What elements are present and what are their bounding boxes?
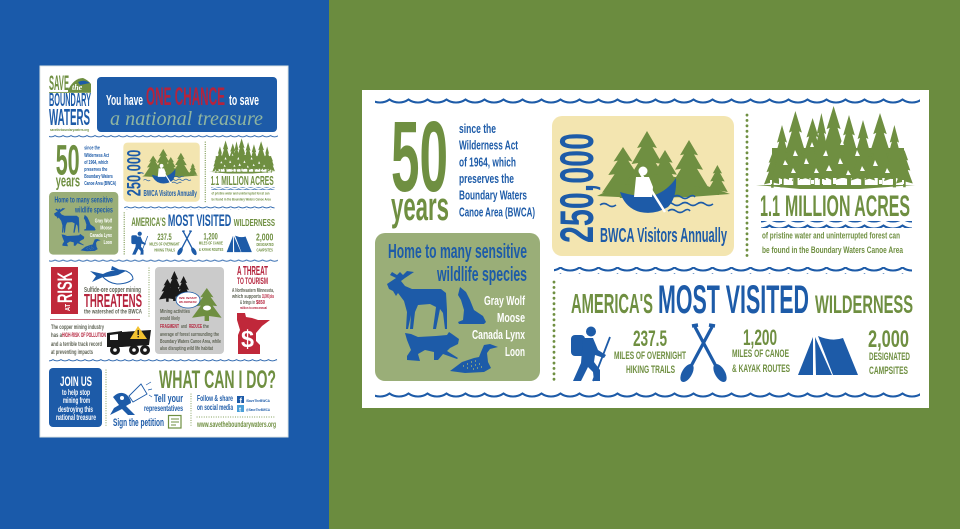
text: pristine water: be found in the Boundary Waters Canoe Area xyxy=(762,245,903,256)
icon: canoe scene xyxy=(597,131,730,213)
text: copper mining industry: and a terrible track record xyxy=(51,341,102,348)
at risk badge: RISK xyxy=(54,272,77,303)
panel: full poster: BOUNDARY xyxy=(49,90,91,110)
panel: fragmented forest xyxy=(155,267,224,354)
poster copy of wilderness card: of 1964, which xyxy=(84,160,108,166)
text: forest impacts: the xyxy=(203,324,209,330)
logo: Save the Boundary Waters: savetheboundarywaters.org xyxy=(50,127,89,132)
text: threatens: Sulfide-ore copper mining xyxy=(84,285,141,294)
logo: Save the Boundary Waters: the xyxy=(72,83,83,92)
text: threat to tourism xyxy=(231,263,274,310)
website url: www.savetheboundarywaters.org xyxy=(196,420,276,429)
text: forest impacts: Mining activities xyxy=(160,309,190,315)
panel: full poster: 18,000 jobs xyxy=(262,294,274,300)
at risk badge xyxy=(51,267,78,314)
poster copy of wilderness card: Boundary Waters xyxy=(84,174,113,180)
icon: forest xyxy=(756,106,915,189)
text: tell your representatives: representatives xyxy=(144,403,183,413)
text: forest impacts: also disrupting wild life habitat xyxy=(160,346,213,352)
stat: 50 years xyxy=(391,101,449,229)
text: forest impacts xyxy=(159,309,221,352)
text: copper mining industry: The copper mining industry xyxy=(51,324,104,331)
poster copy of wilderness card: years xyxy=(56,172,80,191)
heading: most visited wilderness xyxy=(571,278,913,322)
text: threat to tourism: A THREAT xyxy=(237,263,268,278)
text: forest impacts: would likely xyxy=(159,316,181,322)
stat: canoe routes: 1,200 xyxy=(743,325,777,350)
poster copy of wilderness card: MILLION ACRES xyxy=(221,174,274,188)
poster copy of wilderness card: be found in the Boundary Waters Canoe Area xyxy=(212,197,271,202)
stat: campsites: CAMPSITES xyxy=(869,365,908,377)
poster copy of wilderness card: DESIGNATED xyxy=(256,242,274,247)
icon: facebook: /SaveTheBWCA xyxy=(246,398,270,403)
panel: visitors xyxy=(550,116,734,256)
heading: most visited wilderness: AMERICA'S xyxy=(571,288,653,319)
text: threatens: THREATENS xyxy=(84,291,142,311)
text: wilderness act: since the xyxy=(459,122,496,136)
text: wilderness act: Wilderness Act xyxy=(459,139,519,153)
stat: campsites xyxy=(868,326,910,377)
text: tell your representatives xyxy=(144,393,183,413)
poster copy of wilderness card: MILES OF CANOE xyxy=(199,240,223,246)
poster copy of wilderness card xyxy=(49,135,278,262)
icon: twitter xyxy=(237,405,270,414)
poster copy of wilderness card: & KAYAK ROUTES xyxy=(199,247,223,252)
stat: canoe routes: & KAYAK ROUTES xyxy=(732,363,790,375)
panel: wilderness card xyxy=(362,90,929,408)
stat: 250,000: 250,000 xyxy=(550,133,603,243)
stat: hiking trails: HIKING TRAILS xyxy=(626,364,675,376)
text: follow and share xyxy=(197,394,233,412)
poster copy of wilderness card: Home to many sensitive xyxy=(54,195,113,205)
poster copy of wilderness card: Wilderness Act xyxy=(84,153,109,159)
stat: hiking trails: 237.5 xyxy=(633,326,667,351)
icon: facebook: f xyxy=(240,396,242,405)
panel: join us: to help stop xyxy=(62,388,90,397)
icon: lynx xyxy=(405,332,459,361)
poster copy of wilderness card: Loon xyxy=(104,240,112,246)
heading: wildlife xyxy=(388,241,527,286)
text: pristine water xyxy=(762,231,903,256)
icon: megaphone figure xyxy=(110,382,152,415)
text: wilderness act: Boundary Waters xyxy=(459,189,527,203)
stat: canoe routes: MILES OF CANOE xyxy=(732,348,789,360)
text: copper mining industry xyxy=(51,324,106,356)
text: forest impacts: FRAGMENT xyxy=(160,324,179,330)
icon: mining truck xyxy=(107,326,151,355)
poster copy of wilderness card: WILDERNESS xyxy=(234,217,275,229)
species list xyxy=(472,293,526,359)
banner: one chance: a national treasure xyxy=(110,108,263,130)
icon: black trees xyxy=(159,271,191,302)
text: wilderness act: preserves the xyxy=(459,172,514,186)
species list: Gray Wolf xyxy=(484,293,525,308)
banner: one chance: You have xyxy=(106,92,143,109)
poster copy of wilderness card: 250,000 xyxy=(124,150,146,196)
banner: one chance: to save xyxy=(229,92,259,109)
text: wilderness act: Canoe Area (BWCA) xyxy=(459,205,535,219)
text: threat to tourism: & brings in xyxy=(240,300,255,306)
stat: campsites: DESIGNATED xyxy=(869,351,910,363)
text: threat to tourism: million to area annual xyxy=(240,306,267,310)
icon: hiker xyxy=(571,326,610,381)
icon: fish xyxy=(90,266,133,284)
icon: twitter: t xyxy=(239,406,242,414)
heading: wildlife: wildlife species xyxy=(436,264,527,286)
poster copy of wilderness card: 1,200 xyxy=(204,231,218,241)
heading: what can I do: WHAT CAN I DO? xyxy=(159,366,276,394)
speech bubble: WILDERNESS! xyxy=(179,300,197,304)
poster copy of wilderness card: wildlife species xyxy=(74,204,113,214)
stat: 50 years: years xyxy=(391,185,449,229)
icon: tent xyxy=(798,336,858,375)
text: threat to tourism: which supports xyxy=(231,294,261,300)
text: threat to tourism: TO TOURISM xyxy=(237,276,268,287)
icon: facebook xyxy=(237,396,270,405)
banner: one chance xyxy=(97,77,277,132)
poster copy of wilderness card: Moose xyxy=(100,226,112,232)
top wave xyxy=(375,97,920,104)
divider wave xyxy=(49,359,277,362)
text: follow and share: on social media xyxy=(197,403,233,412)
icon: moose xyxy=(387,271,447,329)
text: copper mining industry: at preventing impacts xyxy=(51,349,93,356)
panel: join us xyxy=(49,368,102,427)
stat: canoe routes xyxy=(732,325,790,375)
logo: Save the Boundary Waters: SAVE xyxy=(49,72,69,95)
stat: 1.1 million acres: 1.1 xyxy=(760,190,780,223)
panel: full poster xyxy=(40,66,288,437)
text: forest impacts: Boundary Waters Canoe Area, while xyxy=(160,339,221,345)
text: wilderness act xyxy=(459,122,535,219)
poster copy of wilderness card: MOST VISITED xyxy=(168,211,231,230)
poster copy of wilderness card: 1.1 xyxy=(211,174,219,188)
poster copy of wilderness card: Canada Lynx xyxy=(90,233,112,239)
species list: Canada Lynx xyxy=(472,327,526,342)
text: copper mining industry: HIGH-RISK OF POLLUTION xyxy=(62,332,106,339)
icon: loon xyxy=(450,344,498,373)
stat: 50 years: 50 xyxy=(391,101,448,213)
icon: wolf xyxy=(458,287,486,324)
panel: full poster: WATERS xyxy=(49,104,90,130)
panel: join us: JOIN US xyxy=(60,373,92,389)
caption: visitors annually: BWCA Visitors Annually xyxy=(600,225,727,247)
poster copy of wilderness card: MILES OF OVERNIGHT xyxy=(149,241,180,246)
panel: join us: mining from xyxy=(63,396,90,405)
poster copy of wilderness card: 237.5 xyxy=(157,232,172,242)
green background panel xyxy=(329,0,960,529)
icon: minnesota dollar: $ xyxy=(241,326,255,353)
panel: join us: destroying this xyxy=(58,405,93,414)
poster copy of wilderness card: AMERICA'S xyxy=(131,215,166,229)
text: threatens: the watershed of the BWCA xyxy=(84,308,142,316)
blue background panel xyxy=(0,0,329,529)
icon: twitter: @SaveTheBWCA xyxy=(246,407,270,412)
text: follow and share: Follow & share xyxy=(197,394,233,403)
heading: wildlife: Home to many sensitive xyxy=(388,241,527,263)
text: threat to tourism: $850 xyxy=(256,300,265,306)
speech bubble: WE WANT xyxy=(179,296,197,300)
species list: Moose xyxy=(497,310,525,325)
poster copy of wilderness card: preserves the xyxy=(84,167,107,173)
poster copy of wilderness card: BWCA Visitors Annually xyxy=(144,188,197,198)
icon: paddles xyxy=(678,325,729,384)
heading: most visited wilderness: MOST VISITED xyxy=(658,278,809,322)
speech bubble xyxy=(176,292,200,308)
icon: petition document xyxy=(168,416,181,428)
at risk badge: AT xyxy=(65,303,72,311)
text: sign the petition: Sign the petition xyxy=(113,417,164,429)
poster copy of wilderness card: CAMPSITES xyxy=(256,248,273,253)
poster copy of wilderness card: Gray Wolf xyxy=(95,219,112,225)
text: tell your representatives: Tell your xyxy=(154,393,183,405)
poster copy of wilderness card: of pristine water and uninterrupted forest can xyxy=(212,190,270,195)
poster copy of wilderness card: HIKING TRAILS xyxy=(154,247,175,252)
species list: Loon xyxy=(505,344,525,359)
stat: 1.1 million acres xyxy=(760,190,910,223)
poster copy of wilderness card: since the xyxy=(84,146,100,152)
stat: hiking trails: MILES OF OVERNIGHT xyxy=(614,350,686,362)
poster copy of wilderness card: 50 xyxy=(56,136,80,183)
text: forest impacts: REDUCE xyxy=(189,324,202,330)
stat: campsites: 2,000 xyxy=(868,326,909,353)
panel: join us: national treasure xyxy=(56,413,96,422)
icon: minnesota dollar xyxy=(237,313,270,354)
text: wilderness act: of 1964, which xyxy=(459,155,516,169)
logo: Save the Boundary Waters xyxy=(49,72,91,132)
poster copy of wilderness card: 2,000 xyxy=(256,232,274,243)
text: copper mining industry: has a xyxy=(51,332,62,339)
bottom wave xyxy=(375,392,920,399)
text: forest impacts: average of forest surrounding the xyxy=(160,332,219,338)
text: forest impacts: and xyxy=(181,324,187,330)
text: threat to tourism: A Northeastern Minnesota, xyxy=(232,288,274,294)
text: threatens xyxy=(84,285,142,316)
banner: one chance: ONE CHANCE xyxy=(146,83,225,111)
icon: green tree xyxy=(192,288,222,321)
panel: wildlife xyxy=(375,233,540,381)
poster copy of wilderness card: Canoe Area (BWCA) xyxy=(84,181,116,187)
stat: hiking trails xyxy=(614,326,686,376)
